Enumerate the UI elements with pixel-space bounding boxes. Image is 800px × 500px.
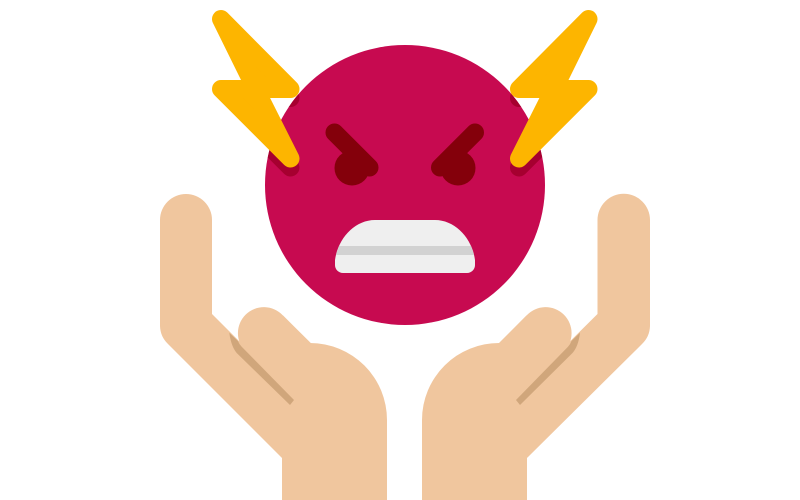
right hand [422, 194, 650, 500]
left hand [160, 194, 387, 500]
left lightning bolt [221, 19, 290, 158]
face circle [265, 45, 545, 325]
angry face [265, 45, 545, 325]
illustration: angry face between two hands [160, 10, 650, 500]
gritted teeth mouth [335, 220, 475, 273]
left finger crease [229, 333, 294, 405]
right finger [480, 307, 572, 420]
right finger crease [516, 333, 580, 405]
right angry eye and brow [440, 132, 476, 186]
left finger [238, 307, 330, 420]
lightning bolt shadows on face [268, 94, 542, 176]
left angry eye and brow [334, 132, 370, 186]
right lightning bolt [519, 19, 588, 158]
